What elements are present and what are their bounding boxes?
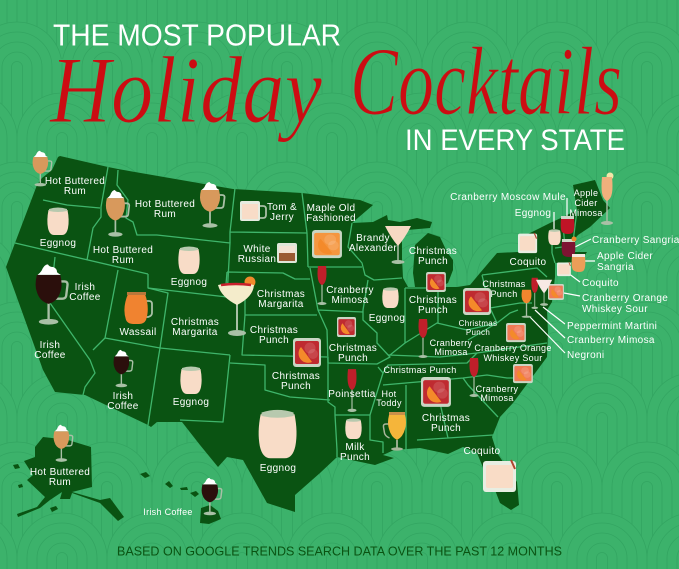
labels: east: Cranberry bbox=[430, 338, 472, 348]
labels: northeast callouts: Whiskey Sour bbox=[582, 304, 648, 315]
labels: central: Cranberry bbox=[326, 285, 374, 296]
labels: east: Cider bbox=[574, 198, 598, 208]
icon: christmas margarita, colorado bbox=[218, 276, 256, 336]
labels: central: Russian bbox=[238, 254, 276, 265]
labels: central: White bbox=[243, 244, 271, 255]
icon: hot buttered rum, montana bbox=[200, 182, 225, 228]
labels: west: Eggnog bbox=[40, 238, 76, 249]
labels: east: Punch bbox=[431, 423, 461, 434]
labels: east: Coquito bbox=[464, 446, 501, 457]
labels: east: Christmas Punch bbox=[383, 365, 457, 375]
labels: northeast callouts: Negroni bbox=[567, 350, 604, 361]
icon: tom and jerry, north dakota bbox=[240, 201, 266, 221]
icon: cranberry sangria, massachusetts bbox=[562, 236, 576, 257]
map: state borders bbox=[15, 167, 577, 457]
labels: central: Toddy bbox=[376, 398, 402, 408]
labels: east: Christmas bbox=[482, 279, 526, 289]
labels: west: Irish Coffee bbox=[143, 507, 193, 517]
labels: central: Christmas bbox=[409, 246, 457, 257]
labels: central: Punch bbox=[418, 305, 448, 316]
labels: west: Eggnog bbox=[171, 277, 207, 288]
icon: eggnog, oregon bbox=[47, 208, 69, 235]
icon: christmas punch, michigan bbox=[426, 272, 446, 292]
title: the most popular: THE MOST POPULAR bbox=[53, 18, 341, 52]
labels: central: Christmas bbox=[409, 295, 457, 306]
map: contiguous united states bbox=[6, 156, 610, 512]
labels: east: Mimosa bbox=[569, 208, 603, 218]
icon: apple cider mimosa, maine bbox=[601, 172, 614, 225]
icon: coquito, florida bbox=[483, 460, 516, 492]
labels: central: Punch bbox=[281, 381, 311, 392]
labels: central: Punch bbox=[418, 256, 448, 267]
labels: east: Apple bbox=[574, 188, 598, 198]
icon: coquito, connecticut bbox=[557, 262, 571, 276]
labels: west bbox=[30, 176, 296, 517]
labels: east: Mimosa bbox=[434, 347, 468, 357]
icon: eggnog, vermont bbox=[548, 229, 561, 245]
labels: central: Christmas bbox=[250, 325, 298, 336]
labels: west: Christmas bbox=[171, 317, 219, 328]
icon: wassail, utah bbox=[124, 292, 152, 324]
icon: cranberry mimosa, north carolina bbox=[470, 358, 478, 397]
labels: northeast callouts: Cranberry Moscow Mule bbox=[450, 192, 566, 203]
labels: central: Eggnog bbox=[369, 313, 405, 324]
labels: northeast callouts: Sangria bbox=[597, 262, 634, 273]
labels: west: Coffee bbox=[34, 350, 66, 361]
labels: west: Margarita bbox=[172, 327, 218, 338]
labels: central: Maple Old bbox=[307, 203, 355, 214]
labels: central: Poinsettia bbox=[328, 389, 376, 400]
map: hawaii bbox=[140, 472, 221, 524]
icon: irish coffee, hawaii bbox=[202, 478, 222, 515]
labels: east: Cranberry Orange bbox=[474, 343, 552, 353]
labels: east bbox=[383, 188, 603, 457]
labels: central: Jerry bbox=[270, 212, 294, 223]
labels: northeast callouts: Cranberry Orange bbox=[582, 293, 668, 304]
labels: west: Rum bbox=[49, 477, 71, 488]
labels: central: Tom & bbox=[267, 202, 297, 213]
labels: northeast callouts bbox=[450, 192, 679, 361]
labels: central: Punch bbox=[338, 353, 368, 364]
labels: northeast callouts: Peppermint Martini bbox=[567, 321, 657, 332]
labels: central: Punch bbox=[340, 452, 370, 463]
leader lines: northeast labels bbox=[530, 198, 595, 353]
icon: white russian, south dakota bbox=[277, 243, 297, 263]
icon: coquito, new york bbox=[518, 233, 537, 253]
labels: west: Hot Buttered bbox=[45, 176, 105, 187]
icon: christmas punch, ohio bbox=[463, 288, 491, 315]
icon: christmas punch, missouri bbox=[337, 317, 356, 337]
labels: northeast callouts: Coquito bbox=[582, 278, 619, 289]
title: holiday cocktails: Holiday bbox=[48, 37, 323, 143]
labels: central: Christmas bbox=[272, 371, 320, 382]
title: holiday cocktails bbox=[48, 28, 622, 143]
icon: eggnog, texas bbox=[259, 410, 297, 458]
labels: east: Punch bbox=[490, 289, 518, 299]
labels: east: Cranberry bbox=[476, 384, 518, 394]
icon: irish coffee, nevada bbox=[36, 264, 68, 325]
labels: east: Christmas bbox=[459, 319, 497, 328]
labels: central: Alexander bbox=[349, 243, 397, 254]
icon: cranberry moscow mule, new hampshire bbox=[561, 216, 574, 234]
labels: west: Irish bbox=[113, 391, 133, 402]
icon: cranberry mimosa, new jersey bbox=[531, 278, 538, 309]
labels: west: Wassail bbox=[119, 327, 157, 338]
labels: central: Fashioned bbox=[306, 213, 356, 224]
labels: central: Hot bbox=[382, 389, 396, 399]
icon: hot toddy, mississippi bbox=[383, 412, 406, 451]
icon: cranberry mimosa, iowa bbox=[318, 266, 326, 305]
labels: central: Christmas bbox=[257, 289, 305, 300]
icon: milk punch, louisiana bbox=[345, 418, 362, 439]
icon: brandy alexander, wisconsin bbox=[385, 226, 411, 264]
icon: poinsettia, arkansas bbox=[348, 369, 356, 412]
labels: west: Irish bbox=[75, 282, 95, 293]
icon: cranberry orange whiskey sour, virginia bbox=[506, 323, 526, 342]
footer: source note: BASED ON GOOGLE TRENDS SEARCH DATA OVER THE PAST 12 MONTHS bbox=[117, 544, 562, 558]
icon: eggnog, new mexico bbox=[180, 366, 202, 394]
icon: apple cider sangria, rhode island bbox=[572, 254, 585, 272]
icon: cranberry mimosa, indiana bbox=[418, 319, 428, 358]
labels: central: Milk bbox=[345, 442, 365, 453]
labels: west: Irish bbox=[40, 340, 60, 351]
labels: northeast callouts: Cranberry Mimosa bbox=[567, 335, 655, 346]
map: alaska bbox=[13, 437, 124, 521]
icon: christmas punch, tennessee bbox=[421, 377, 451, 407]
icon: negroni, pennsylvania bbox=[522, 290, 531, 318]
labels: west: Hot Buttered bbox=[93, 245, 153, 256]
icon: cranberry orange whiskey sour, delaware bbox=[548, 284, 564, 300]
labels: east: Christmas bbox=[422, 413, 470, 424]
labels: west: Rum bbox=[64, 186, 86, 197]
icon: cranberry orange whiskey sour, south carolina bbox=[513, 364, 533, 383]
icon: eggnog, wyoming bbox=[178, 246, 200, 274]
icon: hot buttered rum, alaska bbox=[54, 425, 73, 462]
icon: christmas punch, kansas bbox=[293, 338, 321, 367]
labels: west: Rum bbox=[112, 255, 134, 266]
icon: eggnog, illinois bbox=[382, 287, 399, 308]
labels: northeast callouts: Apple Cider bbox=[597, 251, 653, 262]
labels: west: Hot Buttered bbox=[135, 199, 195, 210]
labels: northeast callouts: Cranberry Sangria bbox=[592, 235, 679, 246]
icon: maple old fashioned, minnesota bbox=[312, 230, 342, 258]
labels: east: Punch bbox=[466, 328, 490, 337]
icon: peppermint martini, maryland bbox=[536, 280, 552, 306]
labels: west: Eggnog bbox=[173, 397, 209, 408]
labels: west: Eggnog bbox=[260, 463, 296, 474]
labels: west: Rum bbox=[154, 209, 176, 220]
labels: central: Mimosa bbox=[331, 295, 369, 306]
labels: west: Coffee bbox=[107, 401, 139, 412]
labels: central: Margarita bbox=[258, 299, 304, 310]
icon: hot buttered rum, washington bbox=[33, 151, 52, 186]
labels: central: Punch bbox=[259, 335, 289, 346]
labels: east: Mimosa bbox=[480, 393, 514, 403]
labels: east: Whiskey Sour bbox=[483, 353, 543, 363]
labels: central bbox=[238, 202, 457, 463]
labels: central: Brandy bbox=[356, 233, 390, 244]
labels: east: Coquito bbox=[510, 257, 547, 268]
labels: northeast callouts: Eggnog bbox=[515, 208, 551, 219]
title: in every state: IN EVERY STATE bbox=[405, 124, 625, 157]
icon: hot buttered rum, idaho bbox=[106, 190, 129, 237]
labels: west: Coffee bbox=[69, 292, 101, 303]
icon: irish coffee, arizona bbox=[114, 350, 133, 387]
labels: west: Hot Buttered bbox=[30, 467, 90, 478]
labels: central: Christmas bbox=[329, 343, 377, 354]
